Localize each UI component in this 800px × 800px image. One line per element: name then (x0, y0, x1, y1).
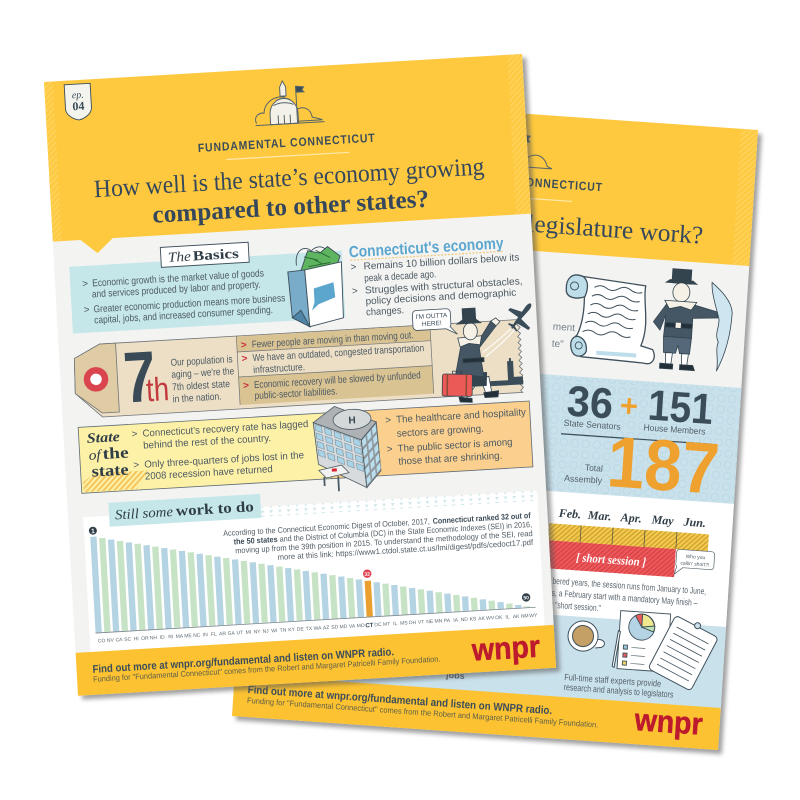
state bullets: lagging: behind the rest of the country. (143, 433, 271, 452)
heading: state of the state (86, 430, 130, 481)
title: How well is the state’s economy growing (93, 153, 485, 203)
state bullets: growing (385, 407, 529, 468)
heading: state of the state: State (86, 430, 120, 447)
heading: the basics: Basics (192, 247, 240, 264)
footer link line: Find out more at wnpr.org/fundamental and listen on WNPR radio. (92, 646, 394, 676)
panel: the basics (68, 237, 345, 334)
state labels: ID (160, 635, 165, 641)
state labels: OR (141, 636, 149, 642)
back header band (263, 96, 758, 266)
state labels: KS (469, 616, 477, 623)
aging text: in the nation. (172, 391, 222, 405)
month labels (557, 506, 706, 530)
month labels: Jun. (682, 515, 706, 530)
state labels: OH (409, 620, 417, 626)
panel: luggage tag (72, 315, 524, 422)
number 187: 187 (605, 422, 722, 510)
aging text (170, 354, 236, 405)
state labels: DC (374, 622, 382, 628)
basics bullets: Economic growth is the market value of goods (92, 268, 264, 289)
label: total assembly: Total (585, 462, 603, 474)
economy bullets: policy decisions and demographic (365, 288, 517, 307)
state bullets: growing: > (385, 415, 391, 426)
contrail (481, 325, 519, 357)
state bullets: growing: sectors are growing. (397, 424, 484, 440)
heading: state of the state: state (91, 462, 129, 481)
tag bullets: > (241, 340, 247, 351)
ranking paragraph: and the District of Columbia (DC) in the State Economic Indexes (SEI) in 2016, (279, 520, 532, 544)
icon: hospital building: H (348, 415, 356, 427)
tag bullets (241, 330, 427, 403)
icon: scroll (562, 274, 659, 364)
icon: capitol dome (253, 79, 325, 126)
state labels: UT (236, 630, 243, 636)
state labels: PA (444, 618, 451, 624)
short session bar: [ short session ] (576, 550, 646, 569)
state labels: CO (98, 638, 106, 645)
back kicker rule (446, 192, 572, 202)
rank marker 32: 32 (364, 572, 370, 578)
staff caption: research and analysis to legislators (563, 682, 674, 700)
state labels: WI (271, 628, 278, 634)
chart heading (108, 494, 261, 527)
sum rule (561, 433, 712, 445)
state labels: AZ (323, 625, 330, 631)
basics bullets: > (83, 305, 90, 316)
header band (44, 54, 532, 256)
plus sign: + (619, 388, 639, 424)
economy bullets: Struggles with structural obstacles, (365, 276, 523, 296)
rank marker 1: 1 (91, 528, 95, 535)
footer funding line: Funding for "Fundamental Connecticut" comes from the Robert and Margaret Patricelli Family Foundation. (93, 655, 441, 684)
state labels: RI (168, 634, 173, 640)
staff caption: Full-time staff experts provide (564, 672, 661, 689)
month labels: Mar. (586, 508, 612, 524)
state bullets: growing: > (386, 444, 393, 455)
back fragment: quote text: te" (551, 339, 564, 350)
tag hole (87, 370, 105, 389)
month labels: Feb. (557, 506, 582, 521)
state labels: WY (529, 613, 538, 619)
basics bullets: > (82, 279, 89, 290)
state labels: NM (521, 613, 529, 620)
state labels: VT (418, 619, 425, 626)
rank marker 32 (363, 569, 372, 578)
stat: 7th: 7 (121, 337, 158, 419)
logo: wnpr: wnpr (633, 702, 704, 742)
state labels: WV (486, 615, 495, 622)
state labels: WA (314, 625, 322, 632)
state bullets: lagging: > (133, 460, 140, 471)
state labels: DE (297, 626, 305, 633)
panel: research staff (234, 581, 727, 712)
ranking paragraph (223, 511, 534, 565)
state bullets: lagging: Only three-quarters of jobs lost in the (144, 450, 305, 471)
state labels: MT (383, 621, 390, 628)
label: state senators: State Senators (563, 418, 621, 432)
back footer: Funding for "Fundamental Connecticut" comes from the Robert and Margaret Patricelli Family Foundation. (247, 696, 599, 730)
speech bubble: i'm outta here (412, 308, 457, 337)
icon: suitcase (442, 371, 472, 396)
state labels: ND (461, 617, 468, 623)
heading: the basics: The (168, 250, 191, 266)
basics bullets (82, 267, 286, 327)
economy bullets (350, 252, 524, 319)
state labels (98, 613, 538, 645)
rank marker 50: 50 (523, 595, 529, 602)
state labels: SD (331, 624, 339, 631)
state bullets: growing: The healthcare and hospitality (396, 407, 526, 426)
heading: state of the state: of (88, 448, 103, 464)
state labels: AK (478, 616, 486, 622)
city silhouette (488, 357, 523, 386)
economy bullets: peak a decade ago. (364, 269, 436, 284)
economy bullets: Remains 10 billion dollars below its (363, 252, 520, 273)
back fragment: quote text: ment (552, 322, 576, 334)
month labels: Apr. (619, 510, 642, 526)
state bullets: growing: those that are shrinking. (398, 451, 503, 468)
state labels: MO (357, 623, 365, 629)
state labels: NV (107, 638, 115, 644)
icon: shopping bag (287, 246, 345, 328)
economy bullets: > (352, 286, 358, 297)
back footer: Find out more at wnpr.org/fundamental and listen on WNPR radio. (247, 684, 552, 717)
rank marker 50 (522, 593, 531, 602)
state labels: HI (134, 636, 139, 642)
label: house members: House Members (643, 422, 706, 437)
state labels: IL (393, 621, 398, 627)
state labels: AK (513, 614, 520, 620)
kicker rule (226, 152, 349, 160)
short session bar (546, 540, 676, 577)
state labels: ME (184, 633, 193, 639)
state labels: NH (150, 635, 158, 641)
icon: pen (612, 630, 620, 668)
badge: episode 04: 04 (72, 99, 85, 113)
state labels: KY (288, 627, 296, 633)
state bullets: lagging: > (131, 429, 138, 440)
state labels: AR (219, 631, 227, 637)
state labels: NE (426, 619, 434, 625)
panel: session calendar (240, 470, 734, 627)
tag bullets: > (241, 353, 248, 365)
ranking paragraph: the 50 states (233, 535, 278, 546)
session paragraph: bered years, the session runs from January to June, (552, 576, 707, 596)
back footer (232, 674, 721, 750)
state labels: MA (176, 634, 184, 640)
state labels: SC (124, 637, 132, 643)
state labels: MS (400, 620, 408, 627)
aging text: aging – we're the (171, 366, 235, 381)
state labels: CA (115, 637, 123, 643)
state bullets: lagging: 2008 recession have returned (145, 464, 273, 483)
title (93, 153, 487, 232)
economy bullets: changes. (366, 305, 404, 318)
state labels: IL (505, 614, 510, 621)
session paragraph (551, 576, 707, 620)
logo: wnpr: wnpr (470, 629, 541, 668)
tag bullets: Economic recovery will be slowed by unfunded (254, 370, 421, 391)
speech bubble: i'm outta here: I'M OUTTA (415, 312, 448, 321)
label: total assembly (564, 461, 604, 486)
heading: state of the state: the (102, 445, 129, 463)
icon: hospital building (312, 404, 383, 493)
footer (76, 625, 556, 696)
state labels: GA (228, 630, 236, 637)
state labels: CT (365, 623, 374, 629)
panel: assembly counts (247, 354, 741, 511)
state labels: NJ (262, 628, 269, 635)
speech bubble: who you calling short: Who you (685, 554, 706, 561)
tag bullets: We have an outdated, congested transportation (252, 343, 425, 364)
heading: the basics (160, 242, 249, 267)
state bullets: lagging (131, 419, 311, 483)
icon: report with pie chart (617, 611, 671, 672)
tag bullets: Fewer people are moving in than moving out. (252, 330, 414, 351)
back fragment: quote text (551, 322, 576, 351)
state labels: IN (203, 632, 208, 638)
icon: coffee cup (567, 620, 606, 653)
back kicker: FUNDAMENTAL CONNECTICUT (425, 168, 603, 194)
month labels: May (650, 512, 675, 528)
number 151: 151 (646, 382, 714, 434)
icon: clipboard (648, 612, 720, 691)
panel: still some work to do (82, 478, 545, 652)
icon: airplane (507, 303, 533, 332)
speech bubble: i'm outta here: HERE! (422, 320, 442, 328)
state labels: TX (306, 626, 313, 632)
state labels: NC (193, 633, 201, 639)
speech bubble: who you calling short: callin' short?! (680, 561, 710, 569)
rank marker 1 (89, 526, 97, 535)
session paragraph: s, a February start with a mandatory May finish – (551, 588, 698, 608)
state labels: MN (434, 618, 443, 625)
ranking paragraph: moving up from the 39th position in 2015. To understand the methodology of the SEI, read (235, 529, 533, 555)
back title: legislature work? (527, 210, 704, 250)
tag bullets: infrastructure. (253, 362, 305, 376)
ranking paragraph: more at this link: https://www1.ctdol.state.ct.us/lmi/digest/pdfs/cedoct17.pdf (277, 538, 534, 562)
fragment: jobs: jobs (445, 670, 465, 681)
icon: connecticut map (310, 282, 336, 311)
state bullets: growing: The public sector is among (397, 437, 513, 455)
label: total assembly: Assembly (564, 473, 603, 486)
ranking paragraph: Connecticut ranked 32 out of (433, 511, 531, 526)
state bullets: lagging: Connecticut's recovery rate has lagged (142, 419, 309, 440)
speech bubble: who you calling short (674, 549, 715, 577)
basics bullets: and services produced by labor and property. (92, 280, 261, 300)
economy bullets: > (350, 262, 357, 273)
state labels: TN (280, 627, 287, 634)
aging text: 7th oldest state (172, 379, 231, 393)
kicker: FUNDAMENTAL CONNECTICUT (197, 131, 376, 155)
aging text: Our population is (170, 354, 233, 369)
title: compared to other states? (152, 186, 430, 229)
tag bullets: > (243, 380, 249, 392)
number 36: 36 (566, 377, 615, 429)
state labels: NY (253, 629, 261, 635)
state labels: MD (339, 624, 348, 630)
state labels: FL (211, 632, 217, 638)
basics bullets: Greater economic production means more business (93, 293, 286, 315)
chart heading: work to do (176, 499, 254, 520)
tag bullets: public-sector liabilities. (254, 386, 338, 402)
front sheet: economy (44, 54, 560, 700)
state labels: VA (349, 623, 356, 630)
bar chart: state rankings (89, 501, 538, 645)
basics bullets: capital, jobs, and increased consumer spending. (94, 305, 273, 326)
back sheet: legislature (232, 96, 762, 754)
session paragraph: r "short session." (551, 600, 601, 613)
long session bar (548, 523, 709, 551)
pilgrim with suitcase (437, 307, 504, 404)
badge: episode 04: ep. (72, 90, 84, 101)
back capitol icon (520, 135, 554, 170)
state labels: IA (453, 617, 459, 624)
state labels: MI (246, 630, 251, 636)
heading: connecticut's economy: Connecticut's economy (348, 235, 504, 261)
state labels: OK (495, 615, 503, 621)
chart heading: Still some (115, 505, 173, 523)
icon: pilgrim with quill (650, 268, 735, 373)
ranking paragraph: According to the Connecticut Economic Digest of October, 2017, (223, 517, 430, 538)
panel: state of the state (78, 401, 533, 493)
badge: episode 04 (64, 83, 92, 121)
staff caption (563, 672, 675, 700)
stat: 7th: th (145, 370, 170, 408)
